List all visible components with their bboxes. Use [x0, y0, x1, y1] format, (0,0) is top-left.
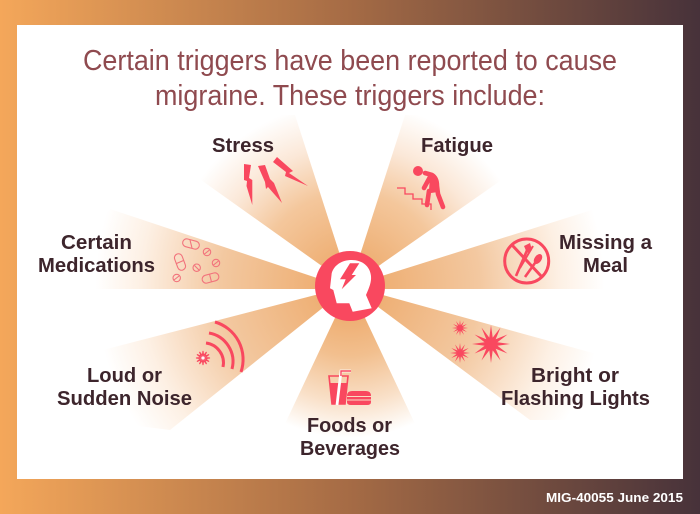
label: Foods or Beverages — [300, 415, 400, 460]
icon: noise burst and waves — [196, 322, 243, 372]
label: Loud or Sudden Noise — [57, 365, 192, 410]
label: Missing a Meal: Meal — [583, 255, 628, 277]
center icon: head with lightning bolt — [315, 251, 385, 321]
label: Certain Medications: Medications — [38, 255, 155, 277]
rays radiating from head — [80, 115, 620, 445]
label: Foods or Beverages: Foods or — [307, 415, 392, 437]
title: Certain triggers have been reported to cause — [83, 45, 617, 77]
icon: flashing stars — [450, 320, 510, 363]
label: Stress: Stress — [212, 135, 274, 157]
label: Bright or Flashing Lights — [501, 365, 650, 410]
label: Loud or Sudden Noise: Loud or — [87, 365, 162, 387]
label: Certain Medications — [38, 232, 155, 277]
icon: drink and burger — [329, 371, 371, 405]
label: Bright or Flashing Lights: Bright or — [531, 365, 619, 387]
label: Bright or Flashing Lights: Flashing Lights — [501, 388, 650, 410]
footer code: MIG-40055 June 2015 — [546, 490, 683, 505]
label: Missing a Meal — [559, 232, 653, 277]
icon: crossed out cutlery — [505, 239, 549, 283]
title — [83, 45, 617, 112]
label: Foods or Beverages: Beverages — [300, 438, 400, 460]
label: Loud or Sudden Noise: Sudden Noise — [57, 388, 192, 410]
label: Certain Medications: Certain — [61, 232, 132, 254]
icon: tired person on stairs — [397, 166, 443, 210]
label: Fatigue: Fatigue — [421, 135, 493, 157]
title: migraine. These triggers include: — [155, 80, 545, 112]
icon: pills — [173, 238, 220, 284]
label: Missing a Meal: Missing a — [559, 232, 653, 254]
icon: stress bolts — [244, 157, 308, 205]
